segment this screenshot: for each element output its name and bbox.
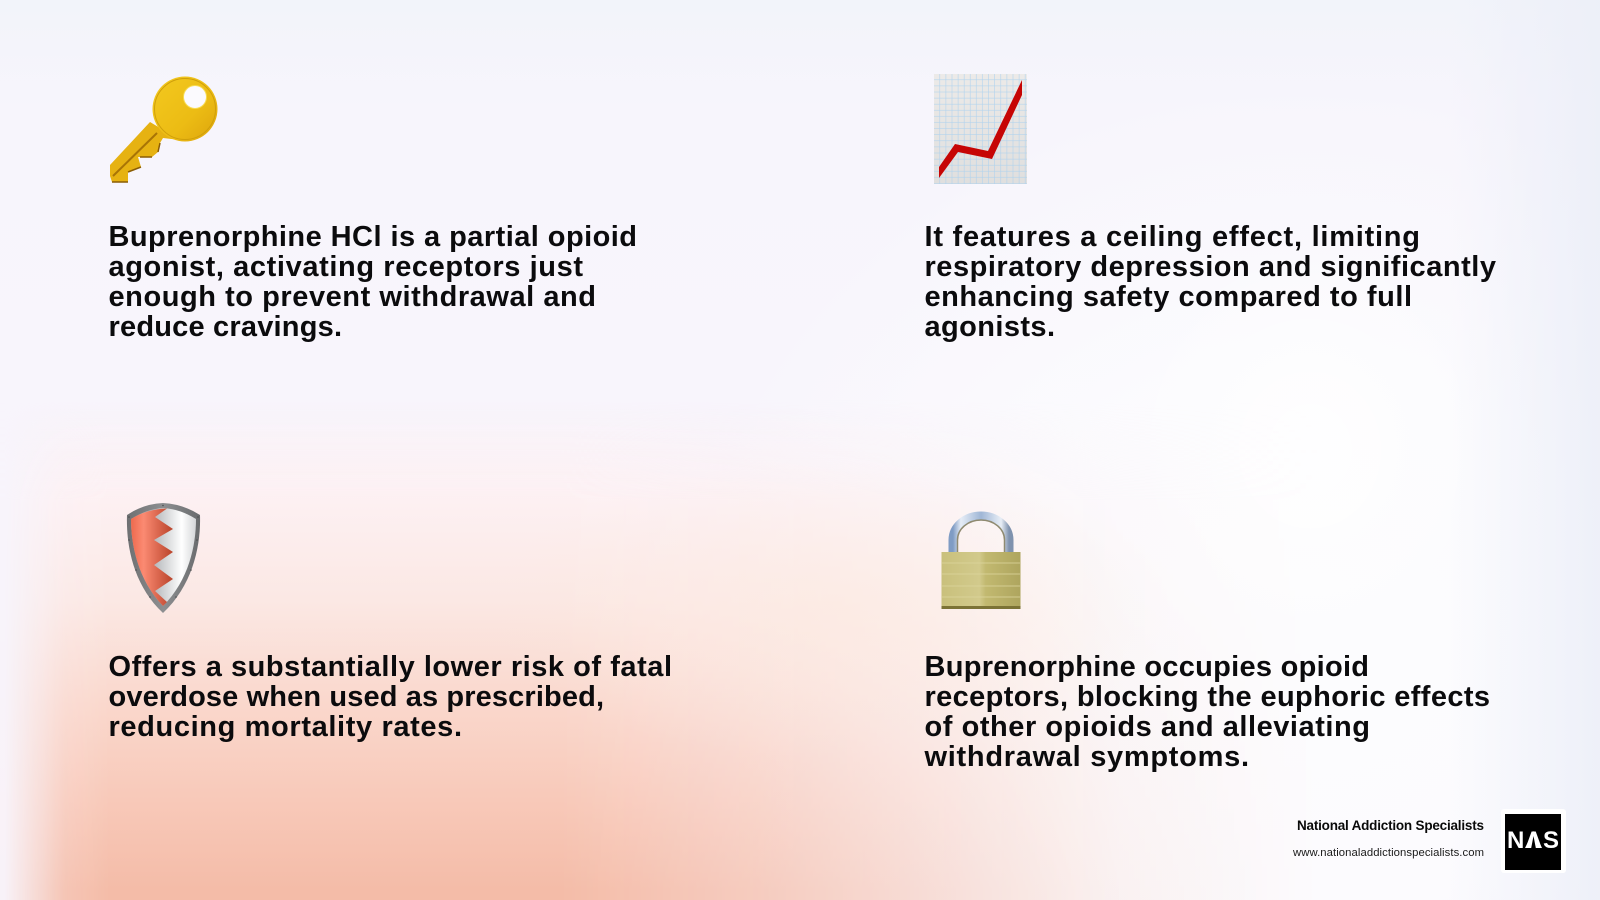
panel: receptor blockade	[924, 516, 1490, 773]
text: partial agonist: reduce cravings.	[108, 311, 342, 343]
logo	[1501, 809, 1566, 873]
text: receptor blockade: Buprenorphine occupies opioid	[924, 651, 1369, 683]
icon: chart with upward trend	[934, 74, 1027, 184]
background peach wash	[8, 477, 1184, 900]
icon: padlock	[942, 516, 1020, 609]
panel: ceiling effect	[924, 74, 1496, 343]
icon: key	[110, 76, 218, 182]
website: www.nationaladdictionspecialists.com	[1292, 847, 1484, 859]
text: ceiling effect: It features a ceiling effect, limiting	[924, 221, 1420, 253]
text: lower overdose risk: reducing mortality rates.	[108, 711, 462, 743]
text: receptor blockade: withdrawal symptoms.	[924, 741, 1249, 773]
panel: lower overdose risk	[108, 503, 672, 743]
text: partial agonist: enough to prevent withdrawal and	[108, 281, 596, 313]
text: ceiling effect: agonists.	[924, 311, 1055, 343]
logo: NAS	[1507, 827, 1559, 854]
text: lower overdose risk: overdose when used as prescribed,	[108, 681, 604, 713]
panel: partial agonist	[108, 76, 637, 343]
text: ceiling effect: enhancing safety compared to full	[924, 281, 1412, 313]
text: ceiling effect: respiratory depression and significantly	[924, 251, 1496, 283]
text: partial agonist: Buprenorphine HCl is a partial opioid	[108, 221, 637, 253]
footer brand	[1292, 809, 1566, 873]
brand name: National Addiction Specialists	[1297, 818, 1484, 833]
text: lower overdose risk: Offers a substantially lower risk of fatal	[108, 651, 672, 683]
icon: shield	[127, 503, 200, 613]
text: partial agonist: agonist, activating receptors just	[108, 251, 583, 283]
text: receptor blockade: receptors, blocking the euphoric effects	[924, 681, 1490, 713]
text: receptor blockade: of other opioids and alleviating	[924, 711, 1370, 743]
